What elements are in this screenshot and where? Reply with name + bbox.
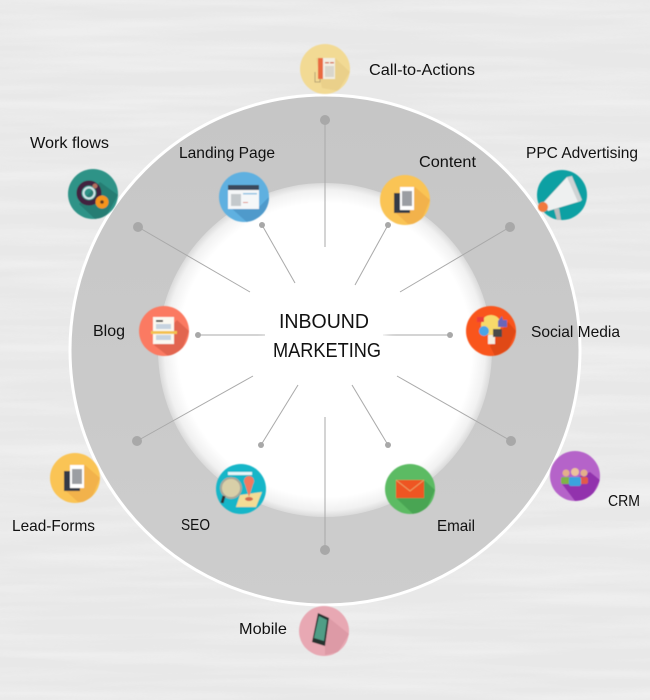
label: CRM: CRM [608,493,640,510]
icon: call-to-actions phone [300,44,350,94]
icon: SEO magnifier and map [216,464,266,514]
label: PPC Advertising: PPC Advertising [526,145,638,162]
label: Email: Email [437,518,475,535]
label: Blog: Blog [93,323,125,340]
label: Call-to-Actions: Call-to-Actions [369,62,475,79]
label: Landing Page: Landing Page [179,145,275,162]
icon: blog page [139,306,189,356]
icon: lead-forms document [50,453,100,503]
label: Work flows: Work flows [30,135,109,152]
label: SEO: SEO [181,517,210,534]
icon: work flows gears [68,169,118,219]
label: Lead-Forms: Lead-Forms [12,518,95,535]
inner white circle [158,183,492,517]
icon: content document [380,175,430,225]
icon: landing page browser [219,172,269,225]
title: Inbound Marketing: MARKETING [273,340,381,362]
icon: mobile tablet [299,606,349,656]
icon: CRM people [550,451,600,501]
outer grey ring [70,95,580,605]
label: Mobile: Mobile [239,621,287,638]
title: Inbound Marketing: INBOUND [279,311,369,333]
label: Social Media: Social Media [531,324,620,341]
connector spokes [132,115,516,555]
label: Content: Content [419,154,477,171]
icon: email envelope [385,464,435,514]
icon: PPC megaphone [537,170,587,220]
title: Inbound Marketing [268,308,386,366]
icon: social media bulb [466,306,516,356]
